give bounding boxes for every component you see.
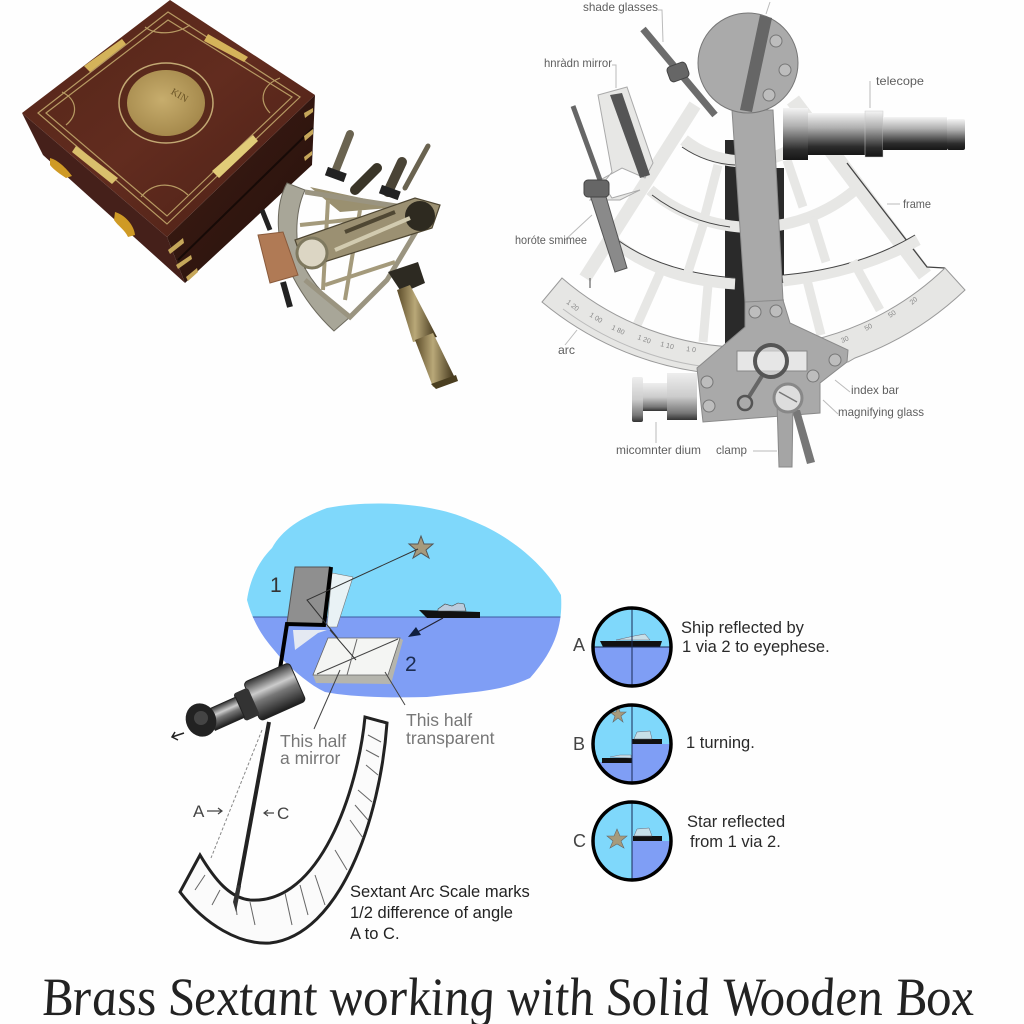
star and light ray [307,536,433,657]
note: half a mirror: a mirror [280,748,340,768]
mirror 1 [270,567,353,669]
label: horizon mirror lower: horóte smimee [515,233,587,247]
label: index bar: index bar [851,383,899,397]
note: half transparent: transparent [406,728,495,748]
label 2: 2 [405,653,417,676]
view C: C [573,831,586,851]
telescope [783,108,965,160]
brass medallion [119,63,213,143]
caption A: Ship reflected by [681,619,805,637]
view B: B [573,734,585,754]
arc scale numbers: 30 [840,335,850,345]
arc scale numbers [565,296,919,354]
wooden box photo: KIN [169,87,190,105]
labels A and C: C [277,804,289,823]
sextant copper micrometer [258,232,298,283]
star [409,536,433,558]
labelled sextant diagram [515,0,965,467]
leaders to notes [314,670,340,729]
arc scale numbers: 1 00 [588,312,603,325]
index window [737,351,807,371]
diagram frame ribs [684,140,796,162]
wooden box photo [22,0,315,283]
arc scale numbers: 50 [887,309,898,320]
telescope in principle diagram [172,662,306,742]
view A [573,605,674,690]
ship [419,603,480,618]
arc scale numbers: 1 0 [686,346,696,354]
index arm [697,110,848,422]
sextant photo [258,134,458,389]
note: arc scale: 1/2 difference of angle [350,904,513,922]
micrometer drum [632,373,697,422]
box left side [22,113,185,283]
arc scale numbers: 1 80 [610,325,626,337]
caption C: from 1 via 2. [690,833,781,851]
diagram frame struts [585,100,925,278]
horizon mirror [573,87,653,272]
magnifying glass [738,345,787,410]
label 1: 1 [270,574,282,597]
clamp [774,384,815,467]
disc screws [701,35,841,412]
label: clamp: clamp [716,443,747,457]
diagram black backing [725,140,784,345]
caption C: Star reflected [687,813,785,831]
label: shade glasses: shade glasses [583,0,658,14]
sextant shades [325,134,428,200]
label: micrometer drum: micomnter dium [616,443,701,457]
label: telescope: telecope [876,74,924,88]
box corners and clasps [168,108,313,281]
principle diagram: sky and sea [247,504,562,698]
label: horizon mirror: hnràdn mirror [544,56,612,70]
note: half transparent: This half [406,710,472,730]
caption A: 1 via 2 to eyephese. [682,638,830,656]
diagram spokes [705,165,718,215]
index arm line C [238,722,269,890]
diagram arc scale [542,268,965,372]
leader lines [565,2,900,451]
view B [574,703,673,785]
labels A and C: A [193,802,205,821]
arrow from ship [412,618,443,635]
sextant arc [278,183,350,331]
view C [573,799,674,883]
box right side [167,95,315,283]
note: half a mirror: This half [280,731,346,751]
note: arc scale: Sextant Arc Scale marks [350,883,530,901]
caption B: 1 turning. [686,734,755,752]
arc scale numbers: 50 [864,323,874,333]
brass inlay strips [84,39,126,72]
labels A and C [193,802,289,823]
arc scale drawing [180,717,387,943]
label: frame: frame [903,197,931,211]
box lid [22,0,315,237]
sextant index arm [295,198,440,268]
index mirror disc [698,13,798,113]
note: arc scale: A to C. [350,925,400,943]
line A dashed [211,730,262,858]
mirror 2 [313,618,443,729]
arc scale numbers: 20 [909,296,919,307]
shade glasses [643,29,715,115]
sextant telescope [388,262,458,389]
arc scale numbers: 1 20 [636,334,652,346]
arc scale numbers: 1 10 [660,341,675,351]
view A: A [573,635,585,655]
sextant frame [310,187,403,212]
arc scale numbers: 1 20 [565,299,580,313]
label: magnifying glass: magnifying glass [838,405,924,419]
label: arc: arc [558,343,575,357]
